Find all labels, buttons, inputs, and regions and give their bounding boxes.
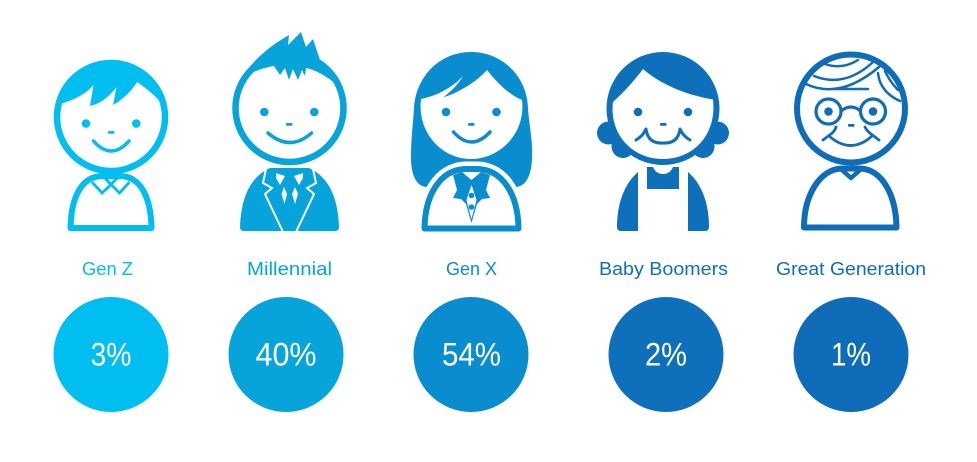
label: Baby Boomers: Baby Boomers [599, 259, 728, 279]
character: Great Generation [797, 54, 905, 228]
icon: Boomer apron bib [647, 167, 679, 189]
icon: Millennial hair [241, 32, 339, 84]
icon: Millennial suit [240, 168, 339, 231]
icon: Great Generation collar [842, 170, 860, 178]
icon: Gen X face [421, 70, 522, 159]
character: Gen X [411, 52, 532, 228]
icon: Gen Z body [70, 176, 152, 228]
icon: Great Generation features [823, 107, 879, 146]
icon: Great Generation body [804, 168, 896, 228]
stat circle: Great Generation 1% [794, 297, 908, 412]
stat circle: Gen X 54%: 54% [442, 336, 501, 372]
stat circle: Millennial 40%: 40% [256, 336, 316, 372]
stat circle: Baby Boomers 2%: 2% [645, 336, 687, 372]
icon: Gen X hair [411, 52, 532, 187]
character: Millennial [236, 32, 344, 232]
icon: Millennial face [260, 108, 319, 142]
stat circle: Millennial 40% [228, 297, 344, 412]
icon: Gen X bow tie [453, 172, 490, 223]
icon: Gen Z head [57, 63, 165, 171]
label: Gen X: Gen X [446, 259, 497, 279]
stat circle: Great Generation 1%: 1% [831, 336, 871, 372]
icon: Boomer features [634, 108, 692, 143]
icon: Boomer face [613, 69, 713, 159]
icon: Boomer left sleeve [617, 172, 638, 231]
icon: Gen X facial features [442, 108, 501, 142]
character: Gen Z [57, 62, 165, 228]
stat circle: Gen X 54% [414, 297, 528, 412]
icon: Gen X tie detail [466, 185, 476, 219]
icon: Millennial lapels [263, 169, 316, 232]
icon: Great Generation glasses [816, 99, 886, 124]
label: Millennial: Millennial [247, 259, 332, 279]
icon: Boomer hair [597, 52, 729, 165]
label: Great Generation: Great Generation [776, 259, 926, 279]
stat circle: Baby Boomers 2% [608, 297, 724, 412]
icon: Boomer right sleeve [688, 172, 709, 231]
stat circle: Gen Z 3% [54, 297, 168, 412]
label: Gen Z: Gen Z [82, 259, 133, 279]
character: Baby Boomers [597, 52, 729, 231]
icon: Great Generation hair [806, 60, 900, 101]
stat circle: Gen Z 3%: 3% [90, 336, 132, 372]
icon: Gen X body [424, 169, 518, 228]
icon: Gen Z face [82, 119, 141, 151]
icon: Gen Z hair [60, 62, 164, 106]
icon: Great Generation head [797, 54, 905, 162]
icon: Millennial collar and tie [276, 173, 303, 204]
icon: Gen Z collar [92, 175, 130, 193]
icon: Millennial head [236, 54, 344, 162]
